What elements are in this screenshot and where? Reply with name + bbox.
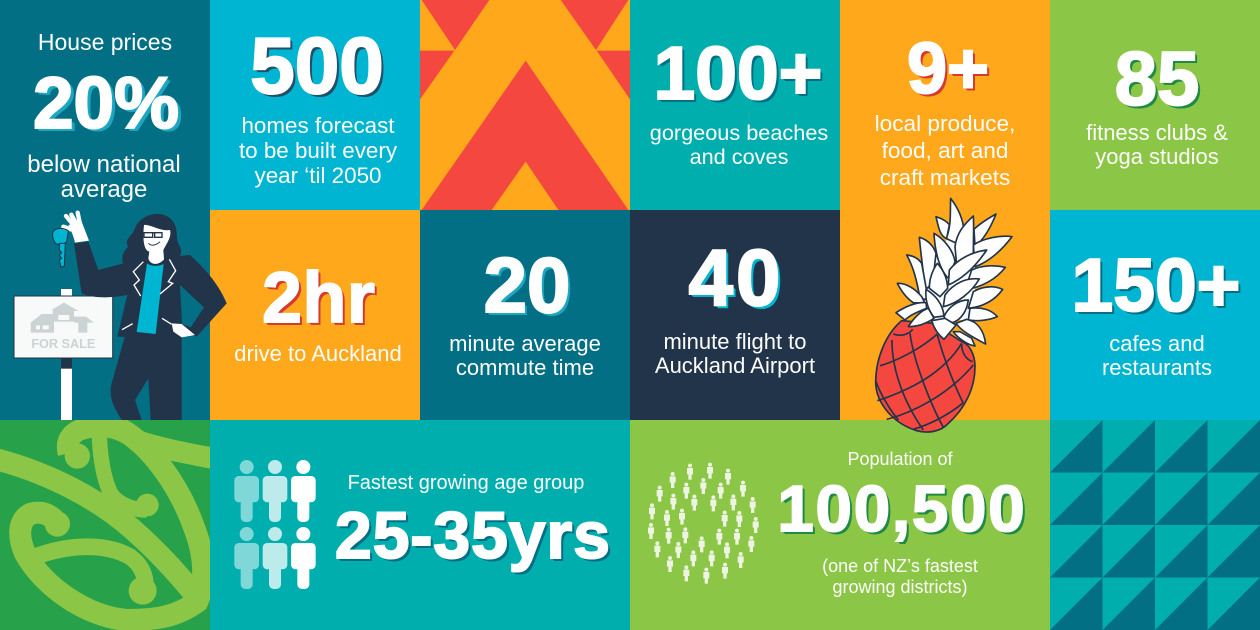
panel: house prices (0, 0, 210, 420)
panel: cafes (1050, 210, 1260, 420)
text: homes forecast: homes forecast (241, 113, 395, 138)
panel: population (630, 420, 1050, 630)
text: cafes and restaurants: restaurants (1102, 355, 1212, 380)
panel: drive to Auckland (210, 210, 420, 420)
icon: key (53, 228, 68, 267)
text: fitness clubs (1086, 120, 1228, 169)
woman (63, 213, 227, 420)
text: local markets: craft markets (880, 165, 1010, 190)
panel: age group (210, 420, 630, 630)
panel: commute (420, 210, 630, 420)
panel: koru pattern (0, 420, 210, 630)
illustration: woman with for sale sign (14, 210, 227, 420)
text: homes forecast (239, 113, 397, 188)
panel: chevron pattern (420, 0, 630, 210)
number: 500: 500 (250, 21, 384, 110)
number: 100+: 100+ (654, 31, 822, 115)
panel: triangle pattern (1050, 420, 1260, 630)
number: 2hr: 2hr (262, 259, 376, 338)
text: commute time (449, 331, 601, 380)
text: cafes and restaurants: cafes and (1109, 331, 1205, 356)
text: fastest growing districts: growing districts) (832, 577, 968, 597)
text: below national average (27, 151, 181, 203)
number: 40: 40 (688, 233, 783, 322)
text: fitness clubs: fitness clubs & (1086, 120, 1228, 145)
text: homes forecast: year ‘til 2050 (255, 163, 381, 188)
text: house prices: House prices (38, 29, 172, 55)
for sale sign: FOR SALE (31, 337, 95, 351)
for sale sign (14, 289, 113, 420)
panel: beaches (630, 0, 840, 210)
number: 20: 20 (484, 241, 570, 329)
pattern: red chevrons (420, 0, 630, 210)
number: 9+: 9+ (907, 29, 989, 109)
text: below national average: below national (27, 151, 181, 178)
panel: pineapple background (840, 210, 1050, 420)
text: local markets: local produce, (875, 111, 1015, 136)
number: 85: 85 (1115, 37, 1199, 122)
text: fastest growing age group: Fastest growing age group (348, 472, 584, 494)
pineapple leaves (896, 198, 1012, 346)
pattern: triangles (1050, 420, 1260, 630)
pattern: koru (0, 420, 210, 630)
number: 25-35yrs: 25-35yrs (335, 498, 611, 572)
text: below national average: average (61, 176, 147, 203)
pineapple body (876, 321, 975, 432)
panel: markets (840, 0, 1050, 210)
icon: ring of people (648, 462, 759, 584)
text: beaches and coves: gorgeous beaches (650, 120, 828, 145)
text: flight to airport: minute flight to (663, 329, 807, 354)
icon: people group (234, 460, 316, 589)
text: flight to airport: Auckland Airport (655, 353, 815, 378)
text: beaches and coves (650, 120, 828, 169)
panel: fitness (1050, 0, 1260, 210)
text: fastest growing districts (822, 556, 978, 597)
number: 20%: 20% (33, 63, 179, 144)
text: flight to airport (655, 329, 815, 378)
illustration: pineapple (874, 198, 1013, 433)
text: commute time: commute time (456, 355, 594, 380)
text: cafes and restaurants (1102, 331, 1212, 380)
text: homes forecast: to be built every (239, 138, 397, 163)
text: local markets (875, 111, 1015, 190)
text: fitness clubs: yoga studios (1095, 144, 1219, 169)
text: population of: Population of (847, 449, 953, 469)
number: 100,500: 100,500 (778, 472, 1026, 545)
text: drive to Auckland: drive to Auckland (234, 341, 402, 366)
number: 150+: 150+ (1072, 243, 1240, 327)
text: commute time: minute average (449, 331, 601, 356)
text: local markets: food, art and (882, 138, 1008, 163)
text: fastest growing districts: (one of NZ’s fastest (822, 556, 978, 576)
panel: homes forecast (210, 0, 420, 210)
text: beaches and coves: and coves (690, 144, 788, 169)
panel: flight (630, 210, 840, 420)
